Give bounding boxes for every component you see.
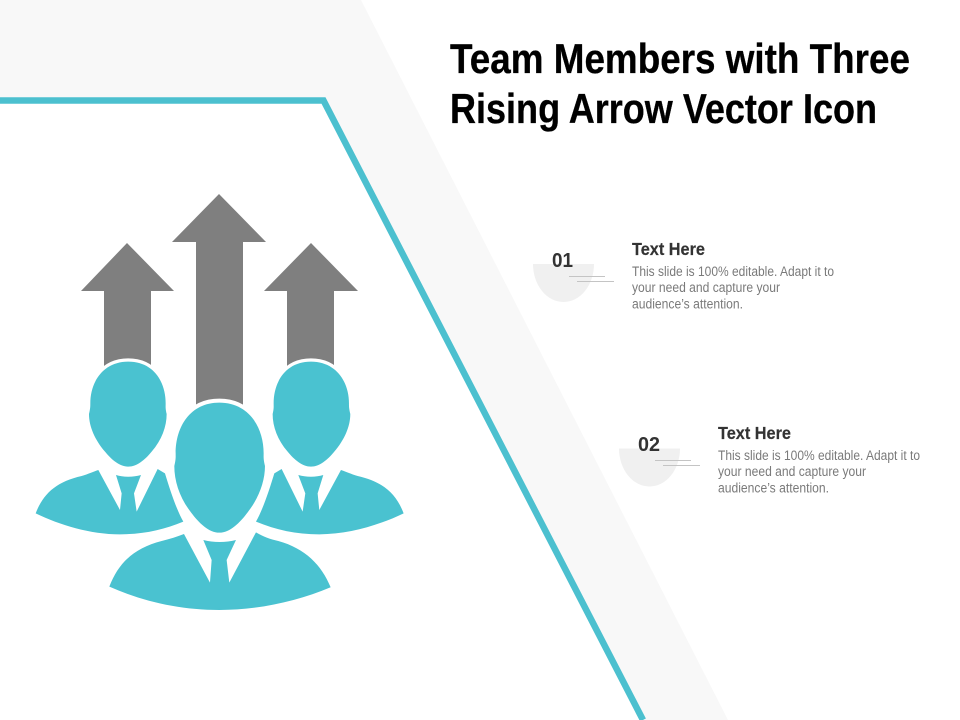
connector lines: [655, 460, 700, 466]
icon: grey semicircle: [533, 264, 594, 302]
body text: This slide is 100% editable. Adapt it to: [632, 264, 834, 279]
icon: left team member: [36, 362, 183, 534]
number 02: 02: [638, 434, 660, 456]
title: Rising Arrow Vector Icon: [450, 85, 877, 132]
connector lines: [569, 276, 614, 282]
icon: right rising arrow: [264, 243, 358, 370]
body text: audience’s attention.: [632, 296, 743, 312]
body text: your need and capture your: [632, 280, 780, 295]
title: Team Members with Three: [450, 35, 910, 82]
item 01: [533, 239, 834, 312]
icon: centre team member: [109, 403, 331, 610]
icon: centre rising arrow: [172, 194, 266, 410]
icon: grey semicircle: [619, 448, 680, 486]
icon: left rising arrow: [81, 243, 174, 370]
icon: three team members with rising arrows: [36, 194, 404, 610]
icon: right team member: [256, 362, 404, 534]
body text: [632, 264, 834, 312]
number 01: 01: [552, 250, 573, 272]
heading: text here: Text Here: [718, 423, 791, 443]
background: light grey angled band: [0, 0, 728, 720]
teal angled divider line: [0, 100, 643, 720]
body text: This slide is 100% editable. Adapt it to: [718, 448, 920, 463]
heading: text here: Text Here: [632, 239, 705, 259]
body text: audience’s attention.: [718, 480, 829, 496]
title: [450, 35, 910, 132]
item 02: [619, 423, 920, 496]
body text: your need and capture your: [718, 464, 866, 479]
body text: [718, 448, 920, 496]
